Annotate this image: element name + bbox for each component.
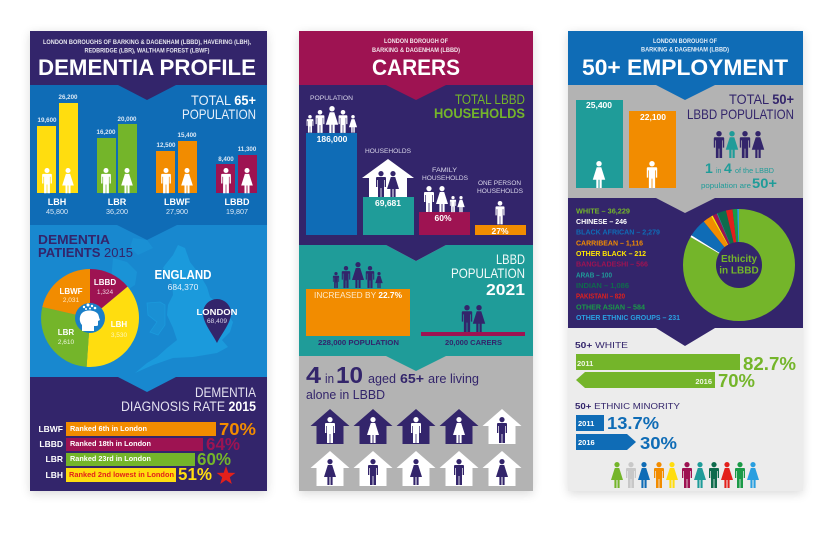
bar chart: 65+ population by borough: 36,200 [106, 207, 128, 216]
pie chart: dementia patients by borough: 2,031 [63, 297, 80, 304]
section: lighter blue map background [30, 225, 267, 377]
heading: total LBBD households [434, 91, 525, 121]
bar chart: diagnosis rate rankings: 64% [206, 434, 240, 454]
bar chart: diagnosis rate rankings: Ranked 23rd in London [70, 456, 151, 463]
bar chart: diagnosis rate rankings: LBWF [38, 424, 63, 434]
icon: head with brain [75, 303, 105, 333]
pictogram: row of coloured people [611, 462, 759, 488]
header block: 50+ EMPLOYMENT [582, 55, 789, 80]
text: 4 in 10 aged 65+ are living alone: 10 [336, 362, 363, 388]
panel: dementia profile [30, 31, 267, 491]
bar chart: 65+ population by borough: LBBD [224, 197, 250, 207]
bar chart: 65+ population by borough: 27,900 [166, 207, 188, 216]
bar chart: 50+ population by gender: 25,400 [586, 100, 612, 110]
header block: LONDON BOROUGHS OF BARKING & DAGENHAM (LBBD), HAVERING (LBH), [43, 39, 251, 46]
heading: total LBBD households: HOUSEHOLDS [434, 105, 525, 121]
bar chart: 65+ population by borough: 45,800 [46, 207, 68, 216]
section: total 65+ population background [30, 85, 267, 240]
chart: 50+ ethnic minority: 2011 [578, 419, 594, 428]
pin: London: LONDON [196, 307, 238, 317]
bar chart: 65+ population by borough: LBR [108, 197, 127, 207]
bar chart: 65+ population by borough: 19,600 [38, 117, 57, 124]
legend: ethnic groups: CHINESE – 246 [576, 219, 627, 226]
chart: 50+ ethnic minority [575, 401, 680, 453]
text: 1 in 4 of the LBBD population are 50+: of the LBBD [735, 168, 774, 175]
text: 4 in 10 aged 65+ are living alone: 65+ [400, 372, 424, 386]
header block [299, 31, 533, 100]
heading: dementia diagnosis rate 2015: DEMENTIA [195, 385, 256, 400]
section: purple households background [299, 85, 533, 261]
bar chart: households: ONE PERSON [478, 180, 521, 187]
text: 4 in 10 aged 65+ are living alone: in [325, 372, 334, 386]
pie chart: dementia patients by borough: 2,610 [58, 339, 75, 346]
chart: 50+ ethnic minority: 13.7% [607, 413, 659, 433]
header block: BARKING & DAGENHAM (LBBD) [372, 47, 460, 54]
bar chart: 65+ population by borough: 19,807 [226, 207, 248, 216]
label: England: ENGLAND [154, 268, 212, 282]
heading: total LBBD households: TOTAL LBBD [455, 91, 525, 107]
bar chart: households: 60% [434, 213, 452, 223]
heading: LBBD population 2021: POPULATION [451, 265, 525, 281]
pie chart: dementia patients by borough: LBWF [59, 287, 83, 296]
chart: 50+ ethnic minority: 30% [640, 433, 677, 453]
bar chart: 50+ population by gender: 22,100 [640, 112, 666, 122]
chart: 50+ ethnic minority: 2016 [578, 438, 595, 447]
bar chart: diagnosis rate rankings: LBH [46, 470, 63, 480]
text: 1 in 4 of the LBBD population are 50+ [701, 160, 777, 191]
donut chart: ethnicity in LBBD [700, 226, 778, 304]
section: grey total population background [568, 85, 803, 198]
chart: 50+ white [575, 340, 796, 391]
chart: 50+ white: 2011 [577, 359, 593, 368]
bar chart: diagnosis rate rankings: LBR [46, 454, 63, 464]
bar chart: households: HOUSEHOLDS [477, 188, 524, 195]
bar chart: 65+ population by borough: LBWF [164, 197, 190, 207]
heading: dementia patients 2015: PATIENTS 2015 [38, 245, 133, 260]
pie chart: dementia patients by borough: LBBD [94, 278, 116, 287]
section: purple ethnicity background [568, 198, 803, 346]
chart: 50+ white: 50+ WHITE [575, 340, 628, 350]
pie chart: dementia patients by borough [41, 269, 139, 367]
bar chart: diagnosis rate rankings: Ranked 6th in London [70, 426, 147, 433]
bar chart: households: HOUSEHOLDS [422, 175, 469, 182]
header block [30, 31, 267, 100]
chart: 50+ white: 70% [718, 371, 755, 391]
icon: single person [496, 201, 504, 224]
header block [568, 31, 803, 100]
heading: dementia patients 2015: DEMENTIA [38, 232, 111, 247]
label: England [154, 268, 212, 292]
bar chart: 65+ population by borough: 15,400 [178, 132, 197, 139]
bar chart: 65+ population by borough: 16,200 [97, 129, 116, 136]
arrow: map section chevron [118, 377, 176, 392]
heading: total 50+ LBBD population [687, 91, 794, 122]
header block: LONDON BOROUGH OF [384, 38, 448, 45]
text: 4 in 10 aged 65+ are living alone [306, 362, 479, 402]
bar chart: 65+ population by borough: 12,500 [157, 142, 176, 149]
bar chart: 65+ population by borough: 26,200 [59, 94, 78, 101]
text: 1 in 4 of the LBBD population are 50+: 50+ [752, 175, 777, 191]
section: diagnosis rate background [30, 377, 267, 491]
heading: dementia diagnosis rate 2015: DIAGNOSIS RATE 2015 [121, 399, 256, 414]
bar chart: households: 27% [491, 226, 509, 236]
header block: DEMENTIA PROFILE [38, 55, 256, 80]
pin: London [196, 299, 238, 343]
bar chart: 65+ population by borough [37, 94, 257, 216]
icon: household house [362, 159, 414, 197]
legend: ethnic groups: OTHER ASIAN – 584 [576, 304, 645, 311]
bar chart: diagnosis rate rankings: LBBD [39, 439, 63, 449]
legend: ethnic groups: ARAB – 100 [576, 272, 612, 279]
heading: dementia diagnosis rate 2015 [121, 385, 256, 414]
legend: ethnic groups: INDIAN – 1,086 [576, 283, 629, 290]
header block: REDBRIDGE (LBR), WALTHAM FOREST (LBWF) [84, 48, 210, 54]
heading: total 50+ LBBD population: TOTAL 50+ [729, 91, 794, 107]
legend: ethnic groups: CARRIBEAN – 1,116 [576, 240, 643, 247]
bar chart: 65+ population by borough: LBH [48, 197, 66, 207]
icon: family group [424, 186, 465, 212]
pictogram: 1 in 4 people [714, 131, 764, 158]
heading: LBBD population 2021: LBBD [496, 251, 525, 267]
text: 1 in 4 of the LBBD population are 50+: in [716, 168, 722, 175]
bar chart: households [306, 95, 526, 236]
chart: population and carers 2021: INCREASED BY 22.7% [314, 291, 402, 300]
text: 4 in 10 aged 65+ are living alone: are living [428, 372, 479, 386]
pie chart: dementia patients by borough: LBR [58, 328, 74, 337]
text: 4 in 10 aged 65+ are living alone: 4 [306, 362, 321, 388]
pie chart: dementia patients by borough: 1,324 [97, 289, 114, 296]
chart: 50+ ethnic minority: 50+ ETHNIC MINORITY [575, 401, 680, 411]
donut chart: ethnicity in LBBD: Ethicity [721, 254, 757, 265]
panel: carers [299, 31, 533, 491]
heading: LBBD population 2021: 2021 [486, 282, 525, 299]
legend: ethnic groups: PAKISTANI – 820 [576, 294, 625, 301]
text: 4 in 10 aged 65+ are living alone: alone in LBBD [306, 388, 385, 402]
label: England: 684,370 [168, 282, 199, 292]
legend: ethnic groups: OTHER BLACK – 212 [576, 251, 646, 258]
section: light grey white and ethnic minority background [568, 328, 803, 491]
chart: 50+ white: 82.7% [743, 354, 796, 374]
bar chart: households: FAMILY [432, 167, 458, 174]
bar chart: households: 69,681 [375, 198, 401, 208]
arrow: grey section chevron [656, 198, 715, 213]
bar chart: 65+ population by borough: 8,400 [218, 156, 234, 163]
legend: ethnic groups [576, 208, 680, 322]
section: grey living alone background [299, 356, 533, 491]
bar chart: households: 186,000 [317, 134, 348, 144]
chart: population and carers 2021: 20,000 CARERS [445, 338, 502, 347]
heading: total 50+ LBBD population: LBBD POPULATION [687, 106, 794, 122]
bar chart: diagnosis rate rankings [38, 419, 256, 484]
bar chart: diagnosis rate rankings: Ranked 18th in London [70, 441, 151, 448]
section: teal population 2021 background [299, 245, 533, 371]
heading: total 65+ population [182, 92, 256, 122]
bar chart: households: POPULATION [310, 95, 353, 102]
pin: London: 68,409 [207, 318, 227, 325]
legend: ethnic groups: BLACK AFRICAN – 2,279 [576, 230, 660, 237]
bar chart: diagnosis rate rankings: 70% [219, 419, 256, 439]
bar chart: diagnosis rate rankings: 60% [197, 449, 231, 469]
legend: ethnic groups: OTHER ETHNIC GROUPS – 231 [576, 315, 680, 322]
bar chart: 65+ population by borough: 11,300 [238, 146, 257, 153]
map: England [110, 238, 238, 373]
header block: BARKING & DAGENHAM (LBBD) [641, 46, 729, 54]
text: 1 in 4 of the LBBD population are 50+: population are [701, 183, 751, 190]
pie chart: dementia patients by borough: 3,530 [111, 332, 128, 339]
text: 4 in 10 aged 65+ are living alone: aged [368, 372, 396, 386]
text: 1 in 4 of the LBBD population are 50+: 1 [705, 160, 713, 176]
legend: ethnic groups: WHITE – 36,229 [576, 208, 630, 215]
text: 1 in 4 of the LBBD population are 50+: 4 [724, 160, 732, 176]
heading: total 65+ population: POPULATION [182, 106, 256, 122]
icon: population group [307, 106, 357, 133]
heading: total 65+ population: TOTAL 65+ [191, 92, 256, 108]
header block: LONDON BOROUGH OF [653, 38, 717, 45]
panel: 50+ employment [568, 31, 803, 491]
legend: ethnic groups: BANGLADESHI – 566 [576, 262, 648, 269]
chart: 50+ white: 2016 [695, 377, 712, 386]
icon: red star [217, 466, 235, 484]
chart: population and carers 2021 [306, 262, 525, 347]
bar chart: diagnosis rate rankings: Ranked 2nd lowest in London [69, 472, 174, 479]
pie chart: dementia patients by borough: LBH [111, 320, 127, 329]
donut chart: ethnicity in LBBD: in LBBD [719, 266, 759, 276]
panel shadows [30, 33, 803, 494]
bar chart: 50+ population by gender [576, 100, 676, 188]
pictogram: houses 4 in 10 [310, 409, 522, 486]
bar chart: 65+ population by borough: 20,000 [118, 116, 137, 123]
heading: dementia patients 2015 [38, 232, 133, 260]
header block: CARERS [372, 55, 460, 80]
heading: LBBD population 2021 [451, 251, 525, 299]
chart: population and carers 2021: 228,000 POPULATION [318, 338, 399, 347]
bar chart: diagnosis rate rankings: 51% [178, 464, 212, 484]
bar chart: households: HOUSEHOLDS [365, 148, 412, 155]
